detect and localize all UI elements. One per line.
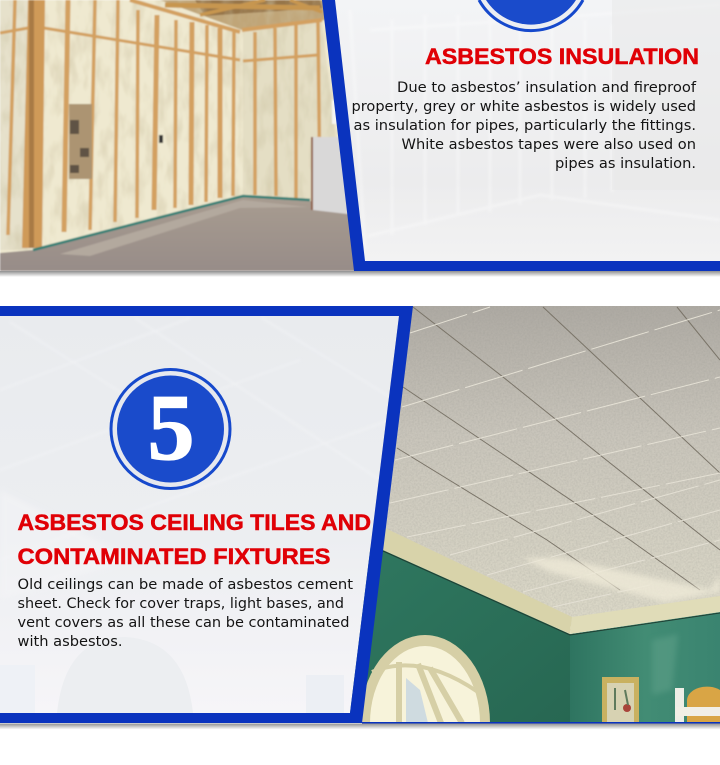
framed picture (602, 677, 639, 723)
number badge (cut off at top) (479, 0, 583, 31)
heading: ASBESTOS CEILING TILES AND (18, 510, 371, 535)
teal base strip (33, 196, 310, 250)
arched window (360, 635, 490, 723)
panel: asbestos insulation (322, 0, 720, 271)
panel background (335, 0, 720, 261)
photo: spray foam insulated wall (0, 0, 360, 271)
number badge (111, 370, 230, 488)
crown moulding (383, 528, 572, 634)
drop shadow: second section (0, 724, 720, 730)
body text (352, 80, 697, 172)
body text: property, grey or white asbestos is widely used (352, 99, 696, 115)
notice panel on wall (69, 104, 92, 179)
body text: White asbestos tapes were also used on (402, 137, 696, 153)
drywall sheet (312, 136, 348, 215)
ceiling surface (350, 306, 720, 626)
left green wall (350, 540, 570, 723)
number 5: 5 (148, 376, 194, 480)
shelf and plate (675, 687, 720, 723)
heading: CONTAMINATED FIXTURES (18, 544, 330, 569)
body text (18, 577, 353, 650)
heading: ASBESTOS INSULATION (425, 44, 699, 69)
panel background (0, 316, 399, 713)
body text: as insulation for pipes, particularly the fittings. (354, 118, 696, 134)
sunlight patch (522, 558, 720, 602)
panel: asbestos ceiling tiles (0, 306, 720, 724)
heading (18, 510, 371, 569)
blue border band (0, 306, 413, 723)
drop shadow: first section (0, 271, 720, 277)
body text: pipes as insulation. (555, 156, 696, 172)
body text: Old ceilings can be made of asbestos cement (18, 577, 353, 593)
body text: vent covers as all these can be contaminated (18, 615, 349, 631)
photo: ceiling tiles in green room (350, 306, 720, 723)
body text: sheet. Check for cover traps, light bases, and (18, 596, 344, 612)
tile seams (397, 307, 720, 590)
right green wall (570, 612, 720, 723)
body text: with asbestos. (18, 634, 122, 650)
concrete floor (0, 196, 356, 271)
blue border band (322, 0, 720, 271)
wooden post (22, 0, 45, 248)
body text: Due to asbestos’ insulation and fireproof (397, 80, 697, 96)
